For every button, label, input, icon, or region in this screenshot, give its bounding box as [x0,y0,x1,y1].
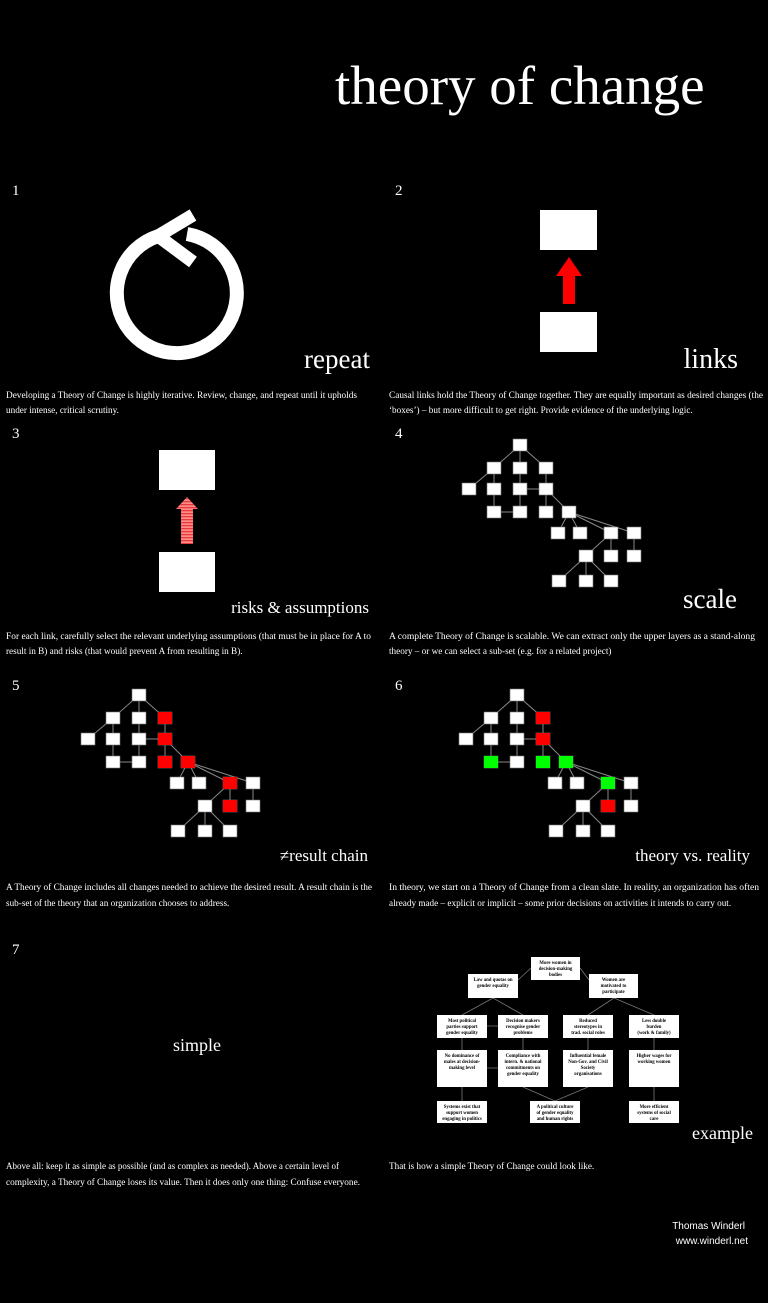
chart: example theory of change: Non-Gov. and Civil [568,1060,608,1065]
title: theory of change [335,55,705,116]
panel: 5 result chain: ≠result chain [280,846,368,865]
panel: 3 risks [6,426,371,656]
chart: example theory of change: males at decision- [444,1060,481,1065]
chart: example theory of change: systems of social [637,1111,671,1116]
panel: 6 theory vs reality: already made – explicit or implicit – some prior decisions on activities it intends to carry out. [389,898,731,908]
chart: example theory of change: burden [647,1025,662,1030]
chart: example theory of change: (work & family) [637,1031,671,1036]
chart: example theory of change: Decision makers [506,1019,540,1024]
panel: 3 risks: For each link, carefully select the relevant underlying assumptions (that must be in place for A to [6,631,371,641]
panel: 3 risks: risks & assumptions [231,598,369,617]
panel: 6 theory vs reality: theory vs. reality [635,846,750,865]
panel: 4 scale: A complete Theory of Change is scalable. We can extract only the upper layers as a stand-along [389,631,755,641]
panel: 4 scale: scale [683,584,737,614]
chart: example theory of change: recognise gender [506,1025,541,1030]
panel: 5 result chain: 5 [12,678,20,694]
chart: example theory of change: gender equality [446,1031,478,1036]
chart: tree red and green [459,689,638,837]
chart: example theory of change: Compliance with [506,1054,541,1059]
chart: example theory of change: support women [446,1111,478,1116]
chart: example theory of change: gender equality [477,984,509,989]
panel: 5 result chain: sub-set of the theory that an organization chooses to address. [6,898,229,908]
panel: 1 repeat: repeat [304,344,370,374]
chart: example theory of change: intern. & national [505,1060,542,1065]
chart: example theory of change: More efficient [640,1105,669,1110]
chart: example theory of change: Systems exist that [444,1105,481,1110]
chart: example theory of change: organisations [574,1072,602,1077]
chart: example theory of change: Society [581,1066,596,1071]
panel: 2 links: Causal links hold the Theory of Change together. They are equally important as desired changes (the [389,390,763,400]
chart: example theory of change: engaging in politics [442,1117,482,1122]
icon: boxes with red arrow [540,210,597,352]
icon: repeat circle arrow [117,215,237,353]
panel: 3 risks: 3 [12,426,20,442]
panel: 4 scale: theory – or we can select a sub-set (e.g. for a related project) [389,646,611,656]
panel: 5 result chain [6,678,372,908]
panel: 5 result chain: A Theory of Change includes all changes needed to achieve the desired result. A result chain is the [6,882,372,892]
panel: 7 simple: Above all: keep it as simple as possible (and as complex as needed). Above a certain level of [6,1161,340,1171]
panel: example [389,957,753,1171]
chart: example theory of change: commitments on [506,1066,540,1071]
panel: 1 repeat: Developing a Theory of Change is highly iterative. Review, change, and repeat until it upholds [6,390,357,400]
chart: example theory of change: and human rights [537,1117,573,1122]
chart: example theory of change [437,957,679,1123]
panel: 7 simple: 7 [12,942,20,958]
chart: example theory of change: More women in [539,961,572,966]
footer: author [672,1221,748,1247]
panel: 7 simple: simple [173,1035,221,1055]
chart: example theory of change: motivated to [601,984,627,989]
chart: tree with red chain [81,689,260,837]
chart: example theory of change: gender equality [507,1072,539,1077]
panel: example: That is how a simple Theory of Change could look like. [389,1161,594,1171]
chart: example theory of change: Most political [448,1019,477,1024]
panel: 4 scale: 4 [395,426,403,442]
chart: example theory of change: problems [513,1031,533,1036]
panel: 2 links: links [684,344,738,375]
chart: example theory of change: bodies [549,973,562,978]
footer: author: Thomas Winderl [672,1221,745,1232]
chart: example theory of change: care [650,1117,658,1122]
chart: example theory of change: A political culture [537,1105,573,1110]
chart: example theory of change: Women are [602,978,625,983]
panel: 3 risks: result in B) and risks (that would prevent A from resulting in B). [6,646,243,656]
icon: boxes with striped arrow [159,450,215,592]
chart: tree [462,439,641,587]
panel: 7 simple [6,942,360,1187]
chart: example theory of change: decision-making [539,967,573,972]
chart: example theory of change: Higher wages for [636,1054,672,1059]
panel: 6 theory vs reality: 6 [395,678,403,694]
panel: 6 theory vs reality: In theory, we start on a Theory of Change from a clean slate. In reality, an organization has often [389,882,759,892]
panel: 1 repeat: 1 [12,183,20,199]
panel: 2 links [389,183,763,415]
chart: example theory of change: parties support [446,1025,478,1030]
panel: 1 repeat [6,183,370,415]
chart: example theory of change: participate [602,990,625,995]
chart: example theory of change: No dominance of [445,1054,480,1059]
panel: 2 links: 2 [395,183,402,199]
panel: 7 simple: complexity, a Theory of Change loses its value. Then it does only one thing: Confuse everyone. [6,1177,360,1187]
chart: example theory of change: Less double [642,1019,666,1024]
chart: example theory of change: trad. social roles [571,1031,605,1036]
chart: example theory of change: Law and quotas on [473,978,513,983]
chart: example theory of change: stereotypes in [574,1025,602,1030]
chart: example theory of change: Influential female [570,1054,606,1059]
panel: 4 scale [389,426,755,656]
footer: author: www.winderl.net [675,1236,748,1247]
chart: example theory of change: working women [638,1060,671,1065]
panel: 2 links: ‘boxes’) – but more difficult to get right. Provide evidence of the underlying logic. [389,405,693,415]
chart: example theory of change: making level [449,1066,476,1071]
panel: 6 theory vs reality [389,678,759,908]
panel: 1 repeat: under intense, critical scrutiny. [6,405,119,415]
chart: example theory of change: Reduced [579,1019,597,1024]
chart: example theory of change: of gender equality [537,1111,574,1116]
panel: example: example [692,1123,753,1143]
